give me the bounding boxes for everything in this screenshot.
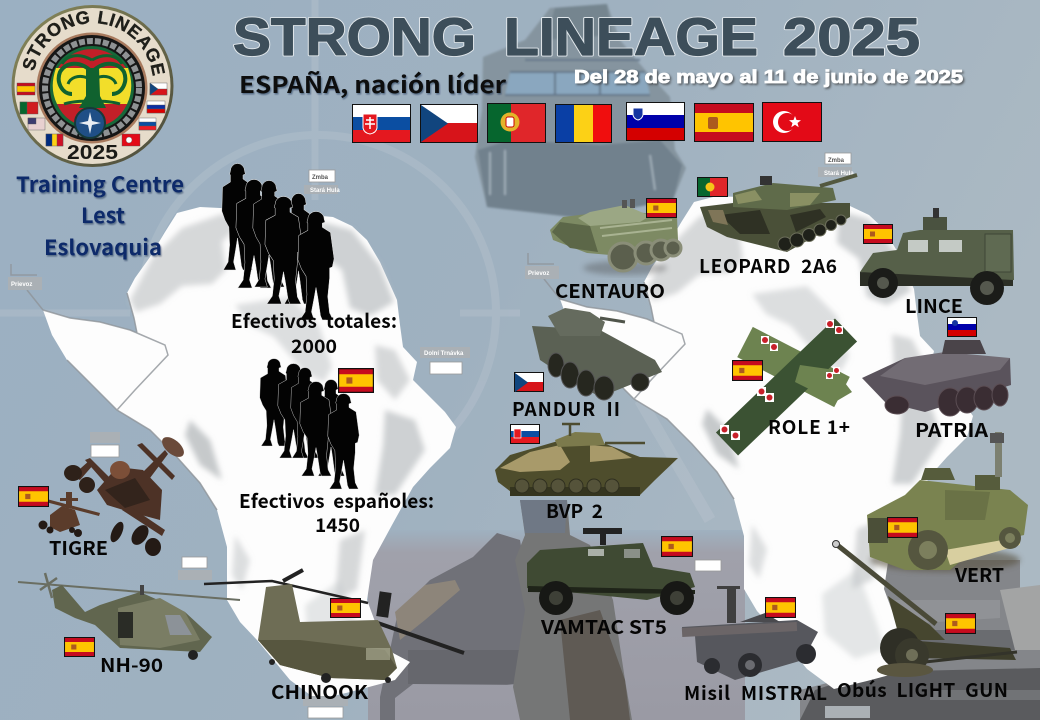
vehicle: BVP 2 [495, 424, 678, 496]
vehicle: VERT [867, 432, 1028, 572]
map place labels: Prievoz [11, 282, 32, 288]
text: training centre location: Training Centre [16, 169, 184, 199]
vehicle: Chinook helicopter [204, 570, 464, 683]
label: VERT: VERT [954, 561, 1004, 588]
label: VAMTAC ST5: VAMTAC ST5 [540, 613, 667, 640]
flag: Czechia, Pandur [514, 372, 544, 392]
flag: Spain [694, 104, 754, 142]
map place labels: Dolní Trnávka [424, 351, 464, 357]
map place labels: Zmba [312, 175, 329, 181]
flag: Spain, Role 1+ [732, 360, 763, 381]
text: training centre location: Lest [81, 200, 125, 230]
label: LINCE: LINCE [905, 292, 963, 319]
background photo: lower silhouettes [368, 500, 1040, 720]
label: Misil MISTRAL: Misil MISTRAL [684, 679, 827, 706]
text: Spanish troops: Efectivos españoles: [239, 487, 434, 514]
title: LINEAGE [504, 8, 758, 67]
emblem [12, 5, 174, 167]
flag: Spain, VAMTAC [661, 536, 693, 557]
flag: Czechia [420, 104, 478, 142]
flag: Spain, Lince [863, 224, 893, 244]
text: total troops: Efectivos totales: [231, 307, 397, 334]
flag: Turkey [762, 102, 822, 142]
flag: Slovenia [626, 102, 684, 140]
icon: NATO badge [75, 108, 105, 138]
label: PANDUR II: PANDUR II [512, 395, 620, 422]
flag: Portugal, Leopard [698, 178, 728, 196]
map place labels: Prievoz [528, 271, 549, 277]
icon: tree [59, 56, 125, 108]
text: Spanish troops: 1450 [315, 511, 360, 538]
emblem: 2025 [67, 142, 118, 164]
flag: Romania [556, 104, 612, 142]
text: training centre location [16, 169, 184, 262]
flag: Spain, Tigre [18, 486, 49, 507]
vehicle: Light Gun howitzer [832, 540, 1017, 677]
map place labels: Stará Hula [310, 188, 340, 194]
soldiers: total troops [222, 164, 334, 320]
flag: Spain, Spanish troops [338, 368, 374, 393]
dates: Del 28 de mayo al 11 de junio de 2025 [574, 67, 963, 87]
title: STRONG [233, 8, 476, 67]
map place labels: Stará Hula [824, 171, 854, 177]
label: NH-90: NH-90 [100, 651, 163, 678]
emblem: STRONG LINEAGE [22, 10, 166, 76]
vehicle: Centauro [550, 199, 681, 275]
label: BVP 2: BVP 2 [546, 497, 603, 524]
flag: Spain, Light Gun [945, 613, 976, 634]
label: CHINOOK: CHINOOK [271, 678, 369, 705]
label: TIGRE: TIGRE [49, 534, 108, 561]
flag: Slovakia, BVP 2 [510, 424, 540, 444]
national flags row [352, 102, 822, 142]
flag: Spain, NH-90 [64, 637, 95, 657]
text: total troops [231, 307, 397, 359]
text: Spanish troops [239, 487, 434, 538]
flag: Spain, Mistral [765, 597, 796, 618]
vehicle: Pandur II [532, 308, 662, 400]
vehicle: Patria [862, 340, 1011, 416]
label: ROLE 1+: ROLE 1+ [768, 413, 850, 440]
vehicle: Tigre helicopters [19, 433, 187, 556]
text: training centre location: Eslovaquia [44, 232, 162, 262]
flag: Spain, Chinook [330, 598, 361, 618]
vehicle: VAMTAC ST5 [527, 528, 695, 615]
NATO compass watermark [0, 0, 710, 520]
emblem flags [17, 83, 167, 146]
text: total troops: 2000 [291, 332, 337, 359]
map place labels [8, 153, 870, 718]
flag: Slovakia [352, 104, 410, 142]
label: Obús LIGHT GUN: Obús LIGHT GUN [837, 676, 1008, 703]
flag: Portugal [488, 104, 546, 142]
label: LEOPARD 2A6: LEOPARD 2A6 [699, 252, 837, 279]
vehicle: Mistral launcher [682, 586, 818, 680]
title: 2025 [783, 8, 920, 67]
vehicle: NH-90 helicopter [18, 573, 240, 660]
title [233, 8, 920, 67]
flag: Slovenia, Patria [948, 318, 976, 336]
flag: Spain, Centauro [646, 198, 677, 218]
label: PATRIA: PATRIA [915, 416, 989, 443]
emblem ring text [34, 23, 153, 95]
map place labels: Zmba [828, 158, 845, 164]
vehicle: Lince [860, 208, 1014, 305]
background photo: ship silhouette [475, 4, 686, 218]
title: STRONG [233, 8, 476, 67]
title: LINEAGE [504, 8, 758, 67]
label: CENTAURO: CENTAURO [555, 277, 665, 304]
title: 2025 [783, 8, 920, 67]
vehicle: Leopard 2A6 [700, 175, 857, 252]
map: right sector [528, 196, 973, 689]
soldiers: Spanish troops [260, 359, 359, 489]
map: left sector [11, 207, 456, 700]
subtitle: lead nation: ESPAÑA, nación líder [239, 66, 507, 100]
vehicle: Role 1+ medical module [720, 320, 852, 444]
flag: Spain, VERT [887, 517, 918, 538]
